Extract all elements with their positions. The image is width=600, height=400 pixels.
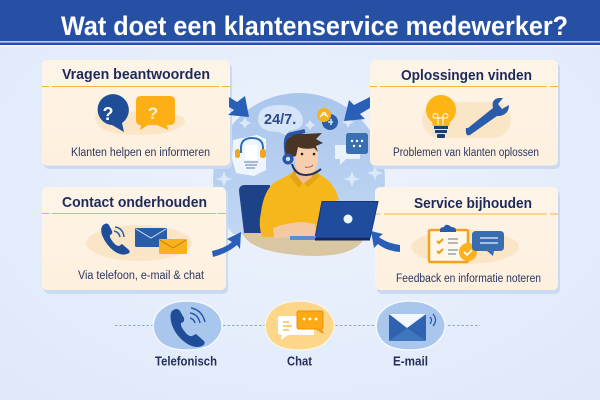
decorative stars [216,116,383,187]
arrow: top right [344,97,370,121]
divider [370,86,558,88]
icon: chat bubbles with keypad [335,133,368,165]
icon: clipboard and bubble [411,225,519,264]
arrow: bottom left [212,232,241,257]
panel: Contact onderhouden [42,187,228,294]
headset earpiece and microphone [282,154,294,164]
shirt [260,172,339,237]
label: E-mail [393,354,428,368]
globe backdrop [213,93,385,234]
speech bubble: 24/7 [258,105,303,136]
channel: Telefonisch [153,301,222,368]
icon: bulb and wrench [422,95,511,138]
forearm [273,222,317,238]
speech bubble: 24/7: 24/7. [264,112,296,128]
arrow: top left [228,96,249,117]
heading: Service bijhouden [414,195,532,212]
panel: Vragen beantwoorden [42,60,232,169]
icon: question bubbles [95,94,185,135]
heading: Oplossingen vinden [401,67,532,84]
divider [42,86,230,88]
central illustration: agent at desk [239,131,378,256]
label: Telefonisch [155,354,217,368]
neck [296,165,312,184]
desk [242,233,366,256]
icon: chat bubbles [265,301,334,350]
collar [290,170,320,188]
eyes [301,153,303,155]
title: Wat doet een klantenservice medewerker? [61,11,568,41]
description: Via telefoon, e-mail & chat [78,270,205,282]
header banner [0,0,600,47]
icon: headset card [232,135,266,176]
divider [375,213,558,215]
arrow: bottom right [371,231,400,252]
label: Chat [287,354,313,368]
panel: Oplossingen vinden [370,60,560,169]
icon: social badges [317,108,338,130]
icon: question bubbles: ? [102,104,114,124]
headset band [286,131,305,156]
panel: Service bijhouden [375,187,560,294]
chair [239,185,270,233]
description: Feedback en informatie noteren [396,273,541,285]
icon: question bubbles: ? [148,104,158,123]
face [295,146,318,176]
icon: envelope [376,301,445,350]
divider [42,212,226,214]
description: Klanten helpen en informeren [71,147,210,159]
heading: Contact onderhouden [62,194,207,211]
globe with floating icons [213,93,385,234]
hair [285,133,323,158]
laptop [290,202,378,240]
heading: Vragen beantwoorden [62,66,210,83]
icon: phone and envelopes [86,224,192,261]
mouth [305,165,313,167]
icon: phone [153,301,222,350]
dotted connector [115,324,480,326]
channel: E-mail [376,301,445,368]
channel: Chat [265,301,334,368]
description: Problemen van klanten oplossen [393,147,539,159]
